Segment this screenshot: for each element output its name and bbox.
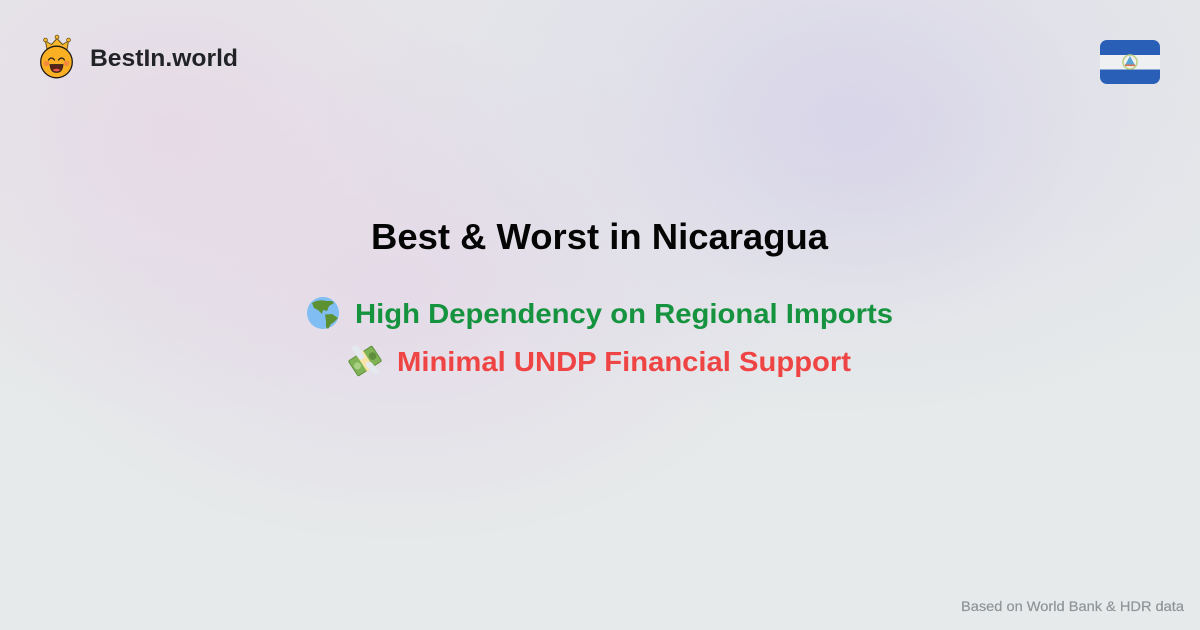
logo: crowned smiley and brand name xyxy=(41,35,238,78)
worst item xyxy=(348,345,851,377)
best item xyxy=(307,297,893,329)
worst item text: Minimal UNDP Financial Support xyxy=(397,346,851,377)
icon: Nicaragua flag xyxy=(1100,40,1160,84)
icon: globe xyxy=(307,297,339,329)
brand name: BestIn.world xyxy=(90,45,238,72)
icon: money with wings xyxy=(348,345,382,377)
best item text: High Dependency on Regional Imports xyxy=(355,298,893,329)
source footnote: Based on World Bank & HDR data xyxy=(961,598,1184,614)
title: Best & Worst in Nicaragua xyxy=(371,216,829,257)
icon: crowned smiley xyxy=(41,35,72,78)
